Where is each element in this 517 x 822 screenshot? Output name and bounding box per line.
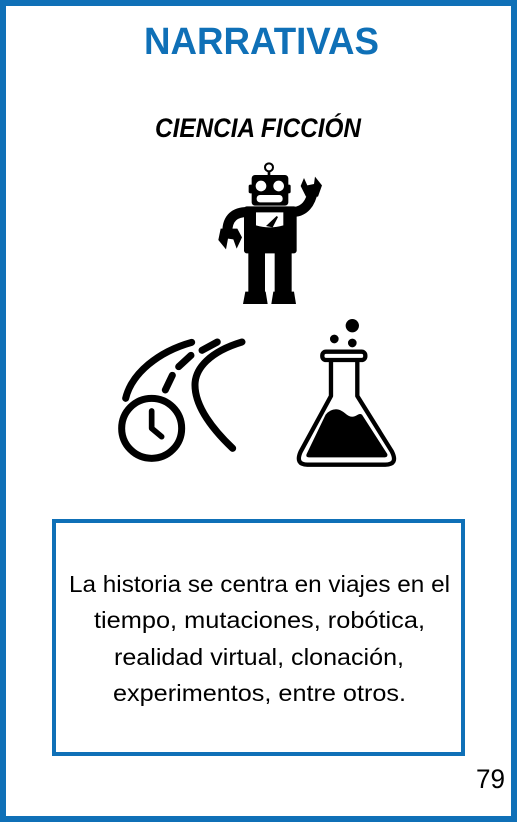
subtitle: CIENCIA FICCIÓN — [155, 112, 361, 143]
description box — [54, 521, 463, 754]
icon: robot — [218, 163, 322, 304]
box outline — [54, 521, 463, 754]
icon: time travel clock — [122, 342, 242, 458]
icon: flask — [299, 319, 394, 465]
description text: realidad virtual, clonación, — [114, 644, 404, 670]
description text — [69, 571, 450, 706]
description text: tiempo, mutaciones, robótica, — [94, 607, 425, 633]
title: NARRATIVAS — [144, 21, 379, 63]
page number: 79 — [476, 764, 505, 794]
description text: La historia se centra en viajes en el — [69, 571, 450, 597]
description text: experimentos, entre otros. — [113, 680, 406, 706]
